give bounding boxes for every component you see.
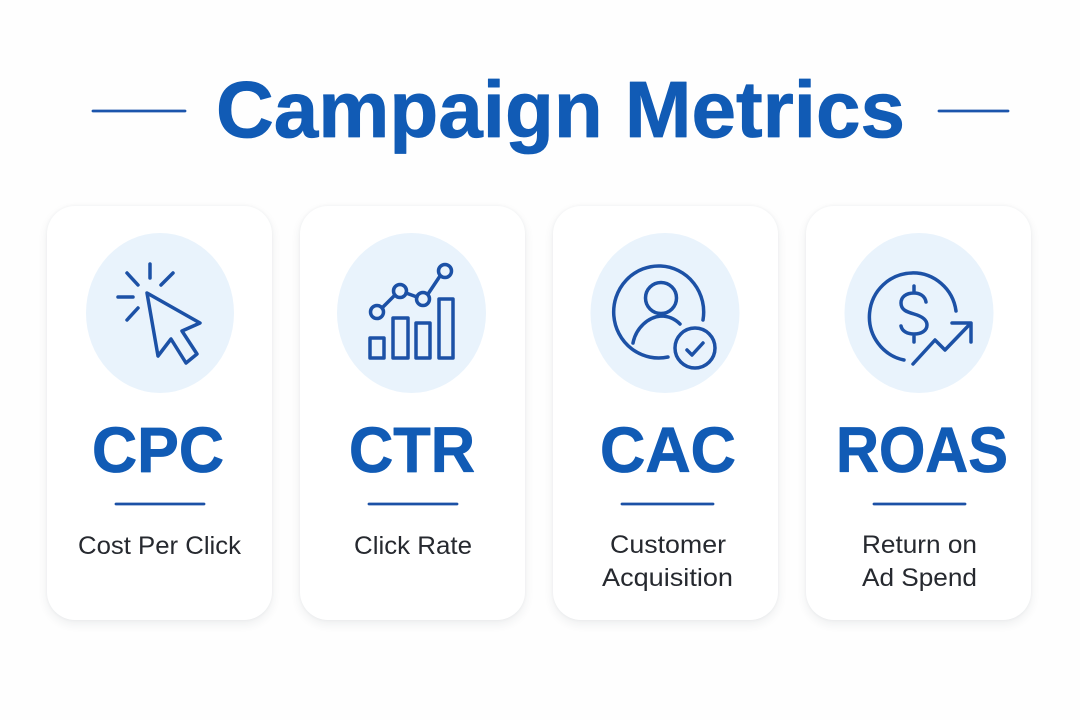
metric: ROAS bbox=[836, 233, 1008, 592]
heading: CTR: CTR bbox=[349, 414, 475, 486]
metric: CPC bbox=[78, 233, 242, 560]
label: Return on Ad Spend: Return on bbox=[862, 531, 977, 559]
icon: dollar with rising arrow bbox=[844, 233, 994, 393]
metric: CTR bbox=[337, 233, 486, 560]
label: Cost Per Click: Cost Per Click bbox=[78, 532, 242, 560]
label: Click Rate: Click Rate bbox=[354, 532, 472, 560]
icon: bar chart with trend line bbox=[337, 233, 486, 393]
title: Campaign Metrics bbox=[216, 65, 905, 154]
label: Customer Acquisition: Customer bbox=[610, 531, 726, 559]
panel: CPC card background bbox=[47, 206, 272, 620]
label: Customer Acquisition: Acquisition bbox=[602, 564, 733, 592]
panel: CTR card background bbox=[300, 206, 525, 620]
label: Return on Ad Spend bbox=[862, 531, 977, 592]
metric: CAC bbox=[590, 233, 740, 592]
panel: CAC card background bbox=[553, 206, 778, 620]
panel: ROAS card background bbox=[806, 206, 1031, 620]
icon: mouse cursor click bbox=[86, 233, 234, 393]
label: Return on Ad Spend: Ad Spend bbox=[862, 564, 977, 592]
heading: CAC: CAC bbox=[600, 414, 736, 486]
icon: verified customer bbox=[590, 233, 740, 393]
heading: ROAS: ROAS bbox=[836, 414, 1008, 486]
heading: CPC: CPC bbox=[92, 414, 224, 486]
label: Customer Acquisition bbox=[602, 531, 733, 592]
